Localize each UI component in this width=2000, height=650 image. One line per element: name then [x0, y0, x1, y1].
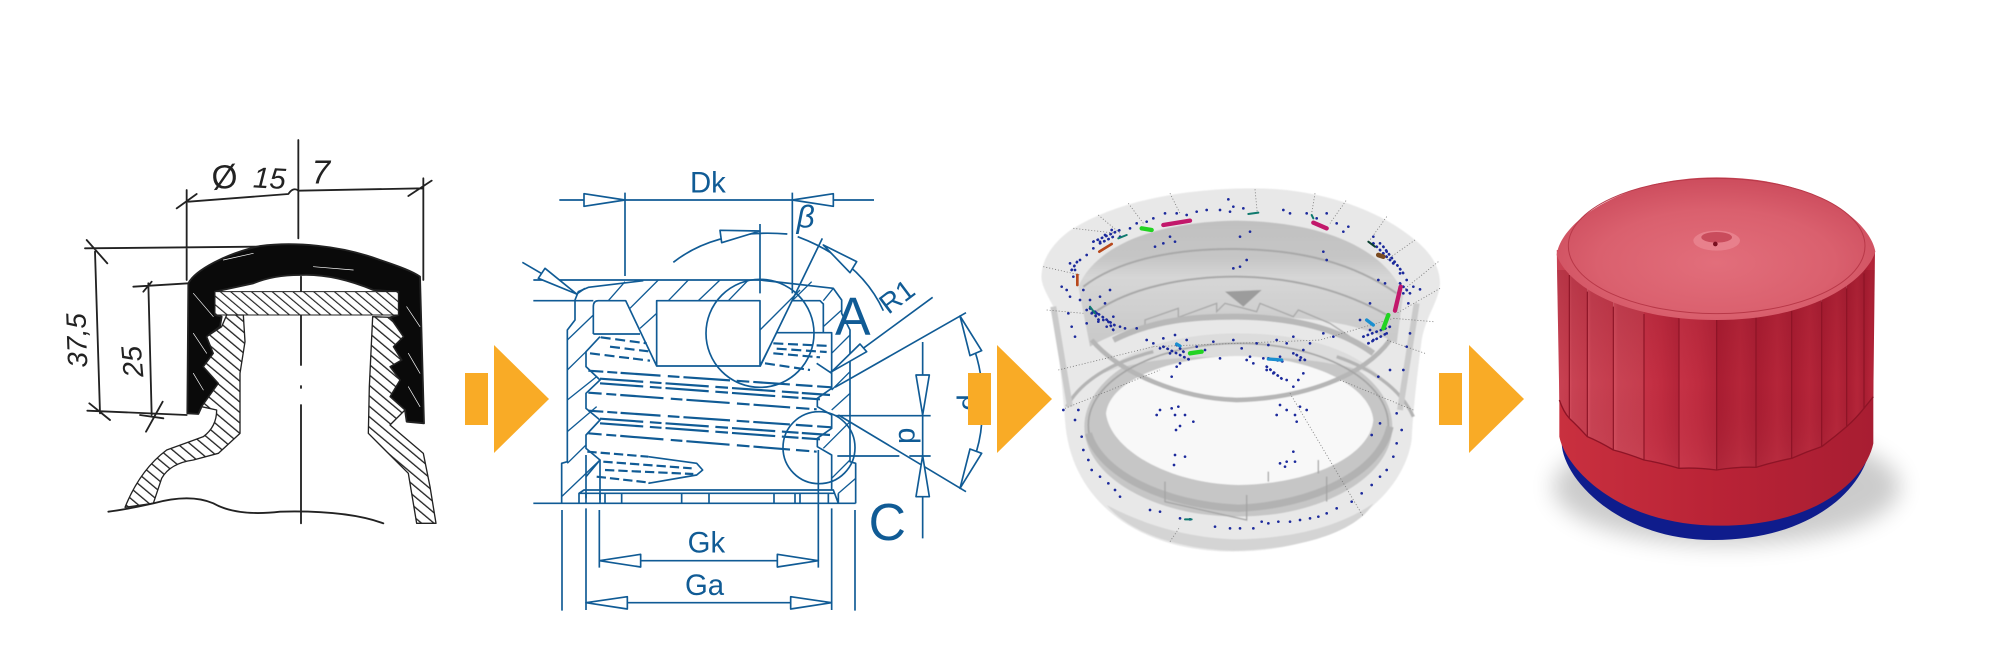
closure: centre dimple: [1693, 231, 1740, 251]
drawing: detail circle A: [706, 279, 814, 387]
sketch: bottle shoulder line: [108, 498, 383, 523]
closure: top face inner ring: [1568, 178, 1865, 314]
closure: red collar band: [1559, 373, 1873, 526]
drawing: body outline: [533, 280, 856, 503]
drawing: pitch dimension p: [835, 342, 931, 538]
sketch: right bottle neck wall: [368, 317, 436, 523]
drawing: pitch dimension p: p: [889, 428, 922, 444]
sketch: handwritten 15: 15: [252, 161, 287, 196]
scan: translucent body shading: [1041, 188, 1440, 552]
drawing: label A: A: [835, 288, 871, 347]
drawing: Gk dimension: [586, 450, 818, 568]
drawing: Dk dimension: [559, 167, 874, 293]
sketch: cap scratches: [193, 253, 420, 407]
panel: CT scan of closure: [1041, 188, 1440, 552]
scan: blue defect points: [1062, 199, 1420, 528]
drawing: thread contour: [586, 337, 832, 490]
drawing: angle beta and radius R1: β: [796, 198, 815, 234]
scan: rear inner wall: [1078, 221, 1403, 347]
scan: denser defect clusters: [1072, 230, 1410, 380]
drawing: label C: C: [869, 493, 906, 551]
panel: finished red closure: [1553, 177, 1900, 545]
drawing: label d: d: [952, 394, 985, 411]
sketch: handwritten dimension diameter: Ø: [210, 158, 239, 197]
scan: threads on rear wall: [1083, 249, 1397, 353]
closure: fluted grip: [1555, 243, 1877, 477]
drawing: detail circle C: [783, 412, 855, 484]
closure: band shadow edge: [1559, 397, 1873, 470]
drawing: dashed thread rows: [587, 337, 832, 483]
drawing: Ga dimension: [562, 508, 855, 611]
scan: translucent outer silhouette: [1041, 188, 1440, 552]
scan: bottom rim: [1107, 503, 1373, 551]
sketch: handwritten 25: 25: [116, 344, 150, 380]
scan: dotted measurement grid: [1043, 189, 1440, 542]
sketch: handwritten 37,5: 37,5: [60, 312, 93, 368]
scan: lower ring: [1084, 337, 1392, 517]
sketch: centre line: [298, 140, 301, 523]
infographic canvas: [66, 139, 1908, 611]
scan: triangular notch: [1225, 290, 1262, 307]
sketch: dimension lines: [85, 178, 432, 432]
drawing: Gk dimension: Gk: [688, 527, 725, 560]
sketch: handwritten 7: 7: [312, 154, 332, 191]
arrow: drawing to scan: [968, 345, 1052, 453]
drawing: angle beta and radius R1: [522, 198, 982, 492]
drawing: section hatching: [562, 280, 856, 497]
closure: blue base ring: [1562, 443, 1871, 540]
arrow: sketch to drawing: [465, 345, 549, 453]
arrow: scan to product: [1439, 345, 1524, 453]
sketch: black cap section: [187, 244, 424, 423]
panel: technical drawing: [522, 167, 985, 611]
drawing: bottom tick marks: [586, 493, 838, 503]
drawing: inner cavity: [593, 238, 832, 373]
closure: soft shadow: [1553, 428, 1900, 545]
drawing: lower thread tongue: [648, 457, 703, 483]
panel: hand sketch of closure: [60, 140, 436, 523]
sketch: hatched liner: [215, 292, 398, 315]
scan: centre band: [1103, 333, 1380, 377]
drawing: Ga dimension: Ga: [685, 569, 725, 602]
closure: top face: [1557, 177, 1875, 320]
closure: flute strips: [1555, 243, 1877, 477]
closure: flute edges: [1569, 273, 1864, 470]
drawing: angle beta and radius R1: R1: [873, 273, 921, 320]
closure: flute shading: [1555, 270, 1877, 477]
scan: bright interior opening: [1106, 356, 1373, 485]
scan: ring contours: [1053, 303, 1417, 520]
drawing: Dk dimension: Dk: [690, 167, 726, 200]
scan: coloured defect patches: [1077, 213, 1401, 519]
sketch: left bottle neck wall: [125, 315, 245, 507]
